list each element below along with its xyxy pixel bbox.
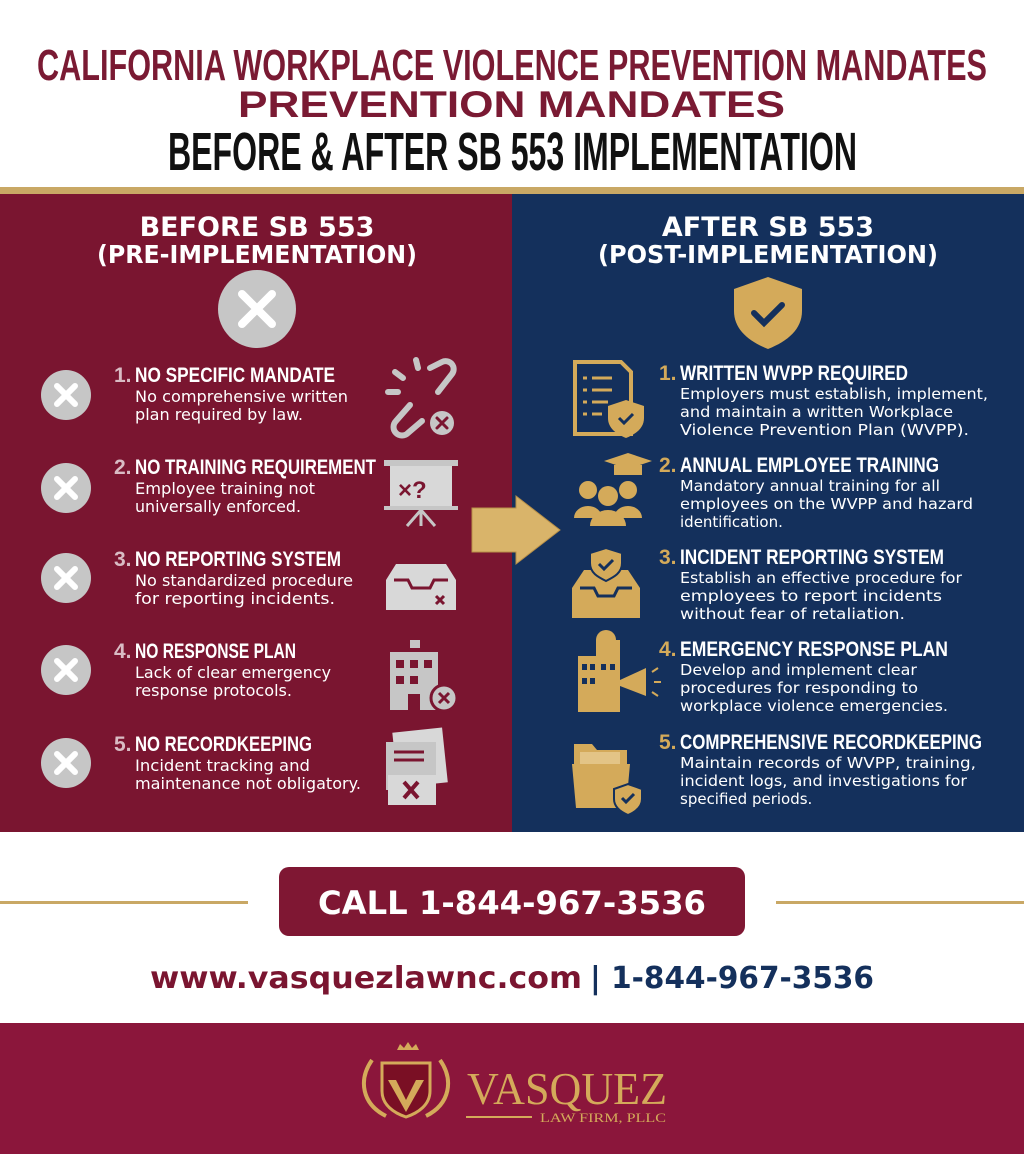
logo: VASQUEZ [467,1063,667,1114]
list: before items: 5. [114,733,132,756]
list: after items: 1. [659,362,677,385]
list: after items: EMERGENCY RESPONSE PLAN [680,638,948,661]
list: after items: Mandatory annual training for all [680,477,940,495]
call button [279,867,745,936]
heading: before [97,212,417,269]
list: before items: plan required by law. [135,405,303,424]
list: after items: 2. [659,454,677,477]
icon: shield check [734,277,802,349]
list: after items: 4. [659,638,677,661]
list: after items: procedures for responding to [680,679,918,697]
list: before items: Incident tracking and [135,756,310,775]
list: before items: universally enforced. [135,497,301,516]
list: after items: 5. [659,731,677,754]
website and phone: www.vasquezlawnc.com [150,961,582,996]
list: after items: incident logs, and investigations for [680,772,968,790]
heading: after: (POST-IMPLEMENTATION) [598,240,938,269]
website and phone [150,961,874,996]
logo [364,1042,667,1125]
heading: after: AFTER SB 553 [662,212,874,243]
list: before items: NO SPECIFIC MANDATE [135,364,335,387]
icon: documents x [386,728,448,805]
footer [0,1023,1024,1154]
list: before items: NO TRAINING REQUIREMENT [135,456,376,479]
call button: CALL 1-844-967-3536 [318,884,706,922]
list: before items: 4. [114,640,132,663]
list: after items: and maintain a written Workplace [680,403,953,421]
icon: inbox with shield [572,548,640,618]
list: after items: identification. [680,513,783,531]
list: after items: employees on the WVPP and hazard [680,495,973,513]
list: before items: NO REPORTING SYSTEM [135,548,341,571]
list: after items: Maintain records of WVPP, training, [680,754,976,772]
list: after items: Violence Prevention Plan (WVPP). [680,421,969,439]
heading: before: (PRE-IMPLEMENTATION) [97,240,417,269]
list: before items: NO RESPONSE PLAN [135,640,296,663]
list: before items: 3. [114,548,132,571]
panel: after [512,194,1024,832]
list: after items [659,362,988,808]
heading: before: BEFORE SB 553 [140,212,374,243]
list: before items: NO RECORDKEEPING [135,733,312,756]
icon: inbox [386,564,456,610]
list: after items: Employers must establish, implement, [680,385,988,403]
list: before items: 2. [114,456,132,479]
title: PREVENTION MANDATES [238,84,785,125]
list: before items: response protocols. [135,681,292,700]
list: after items: employees to report incidents [680,587,942,605]
website and phone: | 1-844-967-3536 [590,961,874,996]
list: after items: INCIDENT REPORTING SYSTEM [680,546,944,569]
icon: building with alarm [390,640,457,711]
list: after items: workplace violence emergencies. [680,697,948,715]
icon: presentation board [384,460,458,526]
arrow [472,496,560,564]
title [37,41,987,182]
decorative lines [0,901,248,904]
list: before items: 1. [114,364,132,387]
heading: after [598,212,938,269]
list: after items: ANNUAL EMPLOYEE TRAINING [680,454,939,477]
icon: broken chain [388,360,454,435]
list: after items: without fear of retaliation. [680,605,905,623]
logo: LAW FIRM, PLLC [540,1110,666,1125]
list: before items: No standardized procedure [135,571,353,590]
list: after items: specified periods. [680,790,812,808]
list: before items: Employee training not [135,479,315,498]
icon: graduation group [574,453,652,526]
icon: presentation board: ×? [398,477,427,504]
list: before items: Lack of clear emergency [135,663,331,682]
icon: document with shield [575,362,644,438]
icon: big x [218,270,296,348]
list: before items: No comprehensive written [135,387,348,406]
list: after items: Develop and implement clear [680,661,918,679]
list: after items: WRITTEN WVPP REQUIRED [680,362,908,385]
icon: building with megaphone [578,630,661,712]
list: before items: maintenance not obligatory. [135,774,361,793]
icon: folder with shield [572,744,642,815]
list: before items: for reporting incidents. [135,589,335,608]
list: before items [41,364,376,793]
list: after items: 3. [659,546,677,569]
panel: before [0,194,512,832]
list: after items: Establish an effective procedure for [680,569,963,587]
